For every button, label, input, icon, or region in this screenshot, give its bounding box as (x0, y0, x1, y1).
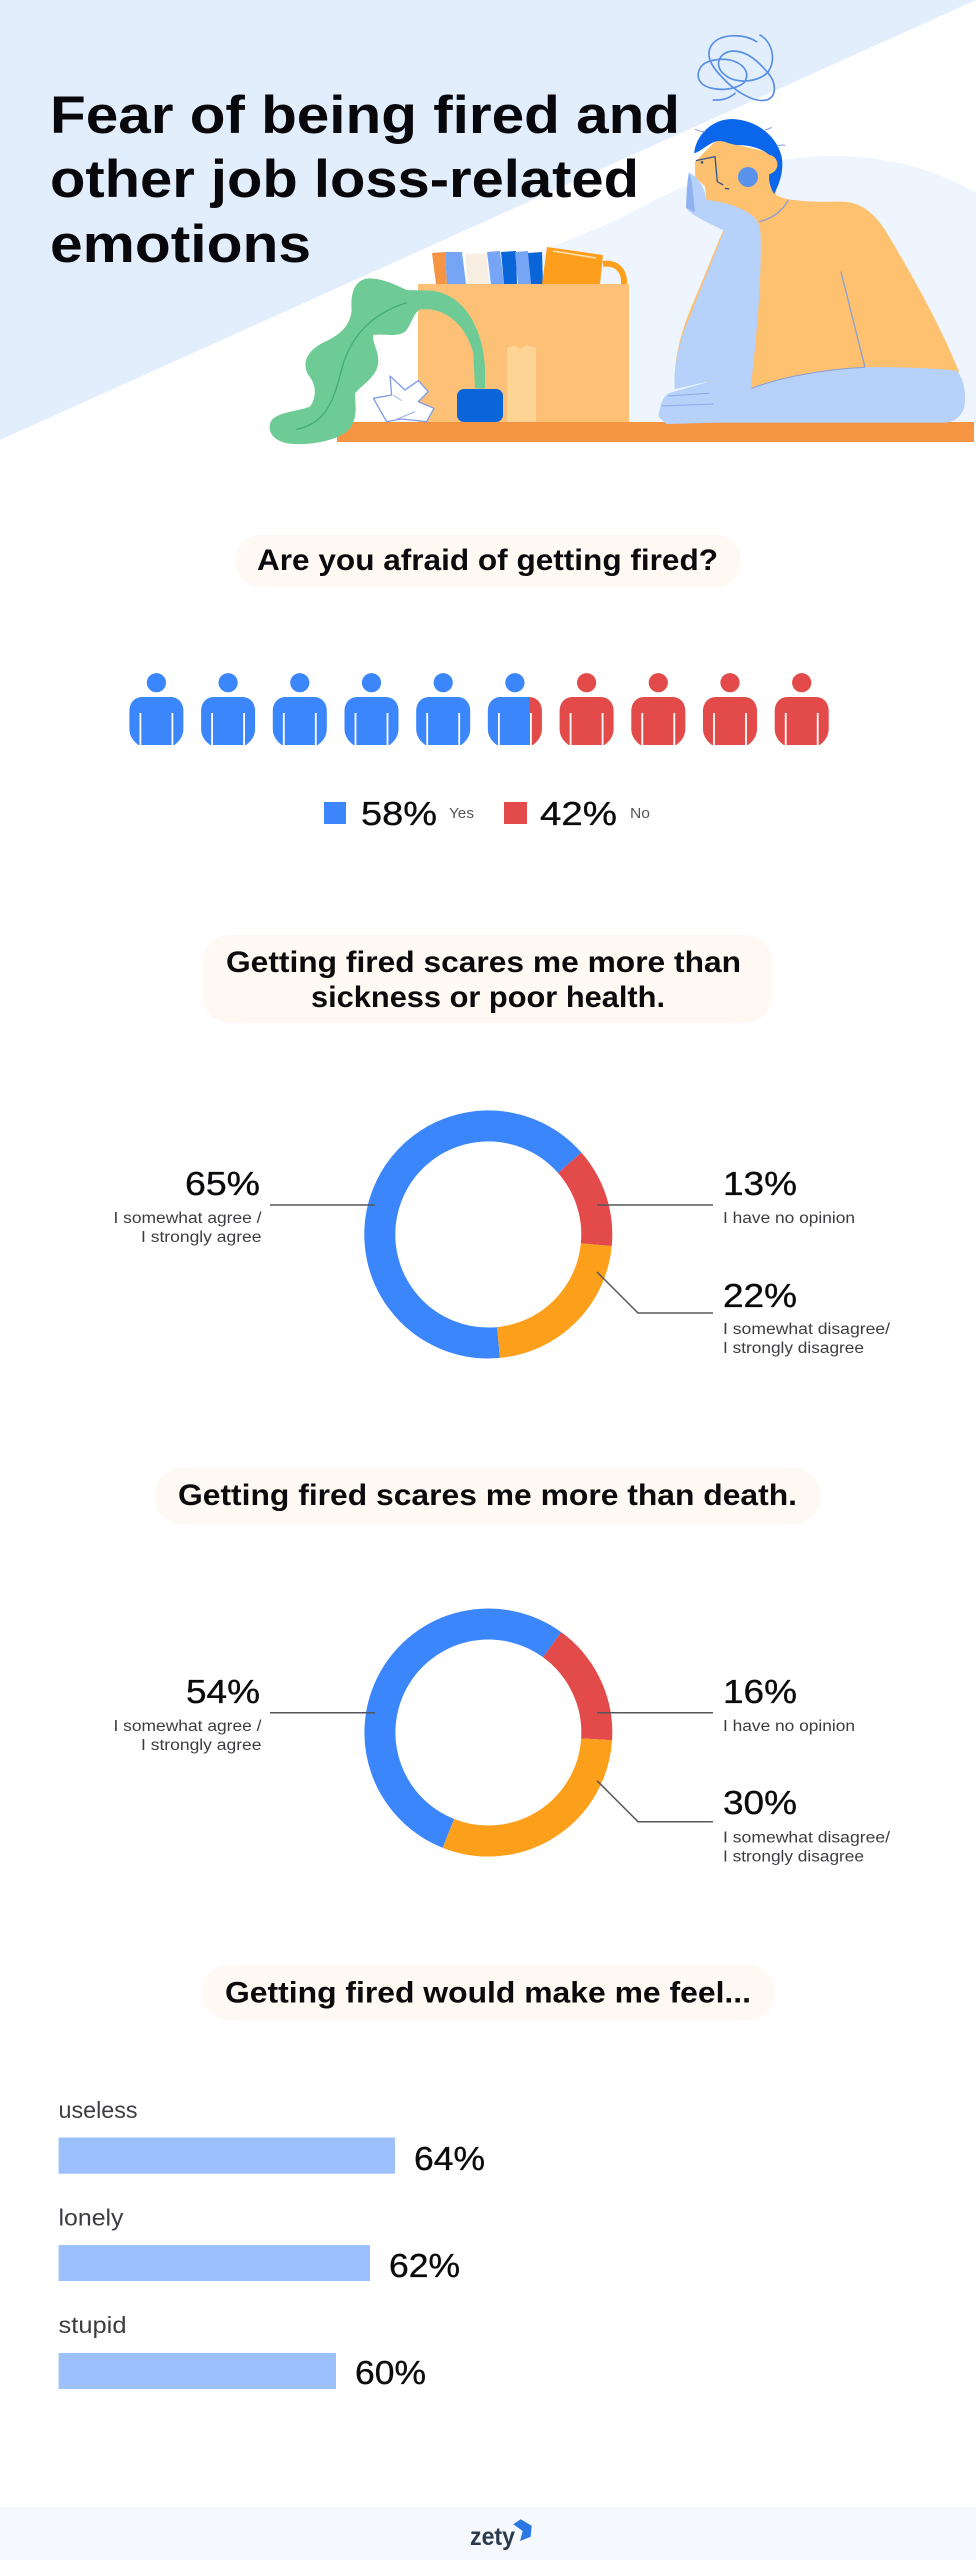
legend: yes / no (324, 795, 650, 832)
heading pill: afraid (236, 535, 741, 587)
labels: sickness donut: I have no opinion (723, 1210, 855, 1227)
labels: sickness donut: 13% (723, 1165, 797, 1202)
labels: sickness donut: I somewhat agree / (114, 1210, 262, 1227)
labels: sickness donut: I somewhat disagree/ (723, 1321, 891, 1338)
title: emotions (50, 215, 311, 274)
illustration: wilted plant (270, 278, 503, 444)
title: other job loss-related (50, 150, 639, 209)
bar: lonely: lonely (58, 2204, 124, 2230)
icon: zety logo (513, 2519, 532, 2541)
heading pill: afraid: Are you afraid of getting fired? (257, 544, 718, 577)
labels: sickness donut: I strongly agree (141, 1229, 262, 1246)
labels: death donut: I have no opinion (723, 1718, 855, 1735)
labels: sickness donut: 22% (723, 1277, 797, 1314)
heading pill: feelings: Getting fired would make me feel... (225, 1976, 751, 2010)
footer (0, 2507, 976, 2560)
illustration: box with books and mug (418, 247, 629, 422)
legend: yes / no: 58% (361, 795, 437, 832)
illustration: crumpled paper (373, 376, 434, 422)
donut chart: death (380, 1624, 597, 1841)
labels: death donut: 16% (723, 1673, 797, 1710)
bar: stupid: stupid (58, 2312, 126, 2338)
bar chart: feelings (58, 2097, 485, 2391)
bar: lonely (58, 2204, 460, 2284)
legend: yes / no: 42% (540, 795, 617, 832)
labels: death donut: 30% (723, 1784, 797, 1821)
labels: sickness donut: 65% (185, 1165, 260, 1202)
illustration: thinking person (658, 119, 965, 424)
labels: death donut: I somewhat agree / (114, 1718, 262, 1735)
legend: yes / no: Yes (449, 805, 474, 822)
heading pill: death (155, 1468, 820, 1524)
labels: death donut: I somewhat disagree/ (723, 1830, 891, 1847)
labels: death donut (114, 1673, 891, 1866)
bar: useless: useless (58, 2097, 138, 2123)
bar: stupid (58, 2312, 426, 2391)
heading pill: feelings (202, 1965, 775, 2020)
header background (0, 0, 976, 440)
heading pill: sickness: sickness or poor health. (311, 981, 665, 1014)
bar: useless (58, 2097, 485, 2177)
title (50, 86, 680, 274)
bar: stupid: 60% (355, 2354, 426, 2391)
heading pill: death: Getting fired scares me more than death. (178, 1479, 797, 1512)
donut chart: sickness (380, 1126, 597, 1343)
legend: yes / no: No (630, 805, 650, 822)
labels: sickness donut: I strongly disagree (723, 1340, 864, 1357)
labels: sickness donut (114, 1165, 891, 1357)
heading pill: sickness (202, 935, 773, 1023)
labels: death donut: I strongly disagree (723, 1849, 864, 1866)
bar: useless: 64% (414, 2140, 485, 2177)
illustration: desk scene (270, 35, 974, 444)
footer: zety (470, 2523, 515, 2551)
bar: lonely: 62% (389, 2247, 460, 2284)
illustration: desk (337, 422, 974, 442)
pictogram: ten people, 58% yes, 42% no (129, 673, 829, 745)
title: Fear of being fired and (50, 86, 680, 145)
heading pill: sickness: Getting fired scares me more than (226, 946, 741, 979)
icon: scribble thought (698, 35, 774, 101)
labels: death donut: 54% (186, 1673, 260, 1710)
labels: death donut: I strongly agree (141, 1737, 262, 1754)
